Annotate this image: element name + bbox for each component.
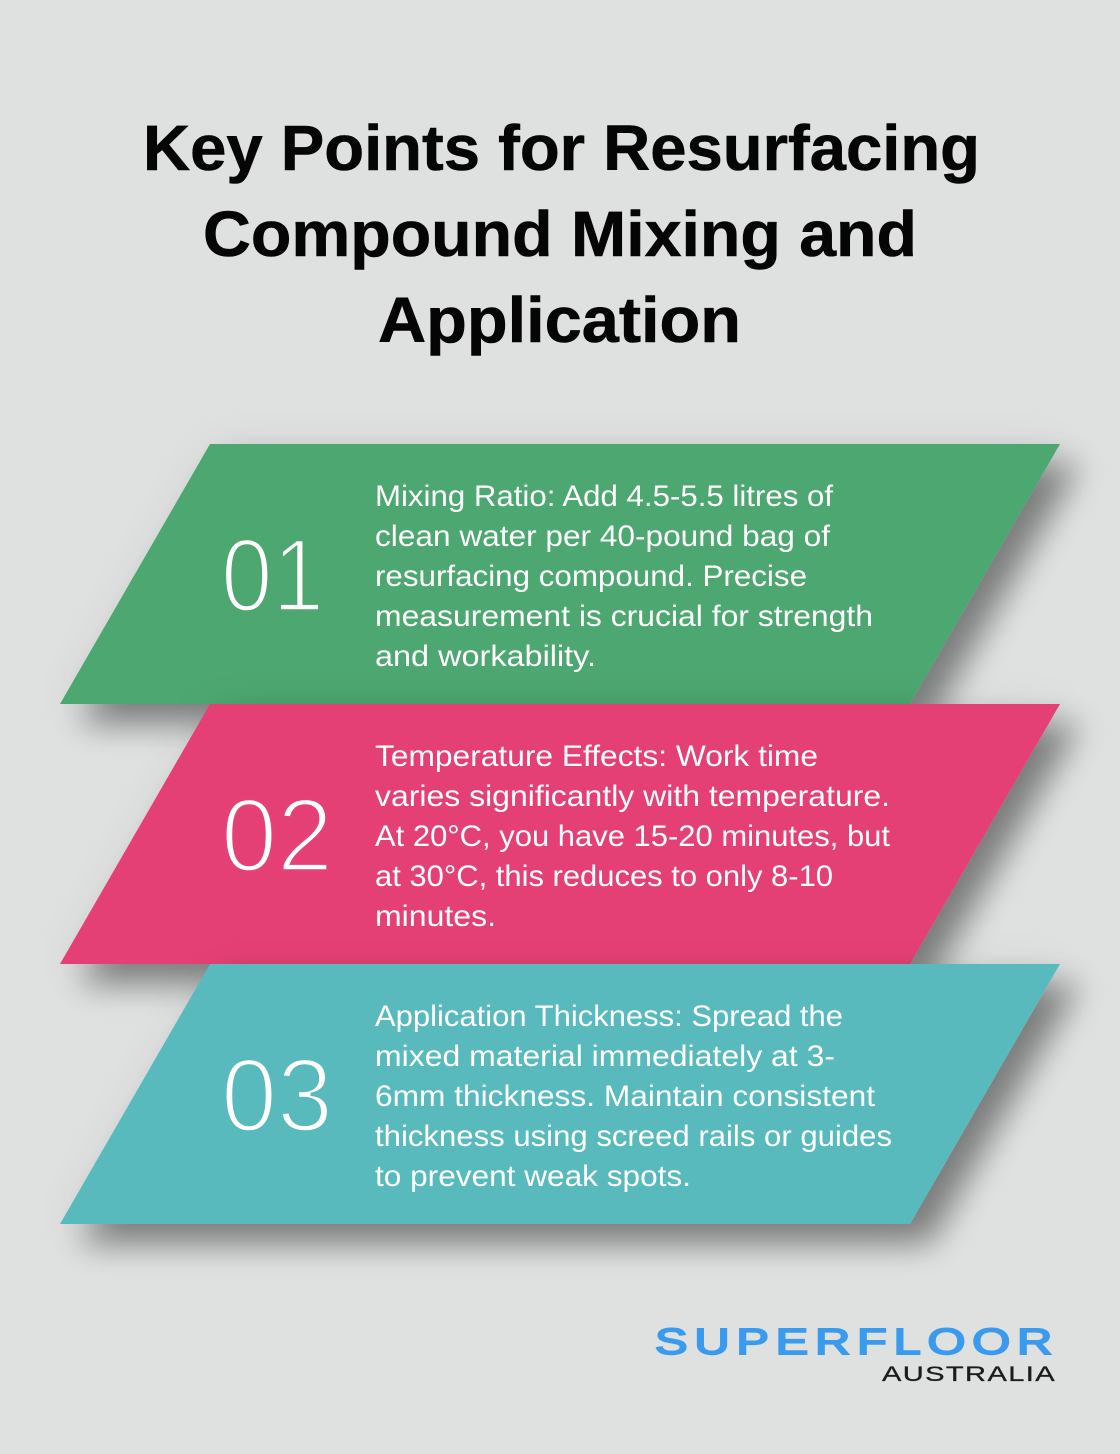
text: temperature effects: varies significantly with temperature. [375, 780, 890, 813]
logo: Superfloor Australia [655, 1321, 1059, 1386]
text: application thickness: mixed material immediately at 3- [375, 1040, 835, 1073]
panel: 03 application thickness [60, 964, 1060, 1224]
text: temperature effects: Temperature Effects: Work time [375, 740, 818, 773]
title [143, 112, 980, 356]
number 02: 02 [221, 778, 333, 894]
text: mixing ratio: resurfacing compound. Precise [375, 560, 807, 593]
text: application thickness: Application Thickness: Spread the [375, 1000, 843, 1033]
title: Compound Mixing and [203, 198, 917, 270]
text: application thickness [375, 1000, 892, 1193]
title: Key Points for Resurfacing [143, 112, 980, 184]
number 01: 01 [221, 518, 324, 634]
pink parallelogram [60, 704, 1060, 964]
panel: 01 mixing ratio [60, 444, 1060, 704]
text: application thickness: to prevent weak spots. [375, 1160, 691, 1193]
logo wordmark: SUPERFLOOR [655, 1321, 1059, 1362]
text: mixing ratio: Mixing Ratio: Add 4.5-5.5 litres of [375, 480, 834, 513]
text: mixing ratio: measurement is crucial for strength [375, 600, 873, 633]
text: mixing ratio: clean water per 40-pound bag of [375, 520, 831, 553]
text: application thickness: thickness using screed rails or guides [375, 1120, 892, 1153]
text: temperature effects: minutes. [375, 900, 496, 933]
text: mixing ratio [375, 480, 873, 673]
text: temperature effects: at 30°C, this reduces to only 8-10 [375, 860, 833, 893]
logo subtitle: AUSTRALIA [882, 1363, 1056, 1386]
title: Application [378, 284, 741, 356]
green parallelogram [60, 444, 1060, 704]
panel: 02 temperature effects [60, 704, 1060, 964]
number 03: 03 [221, 1038, 333, 1154]
text: application thickness: 6mm thickness. Maintain consistent [375, 1080, 876, 1113]
text: mixing ratio: and workability. [375, 640, 596, 673]
text: temperature effects [375, 740, 891, 933]
teal parallelogram [60, 964, 1060, 1224]
text: temperature effects: At 20°C, you have 15-20 minutes, but [375, 820, 891, 853]
